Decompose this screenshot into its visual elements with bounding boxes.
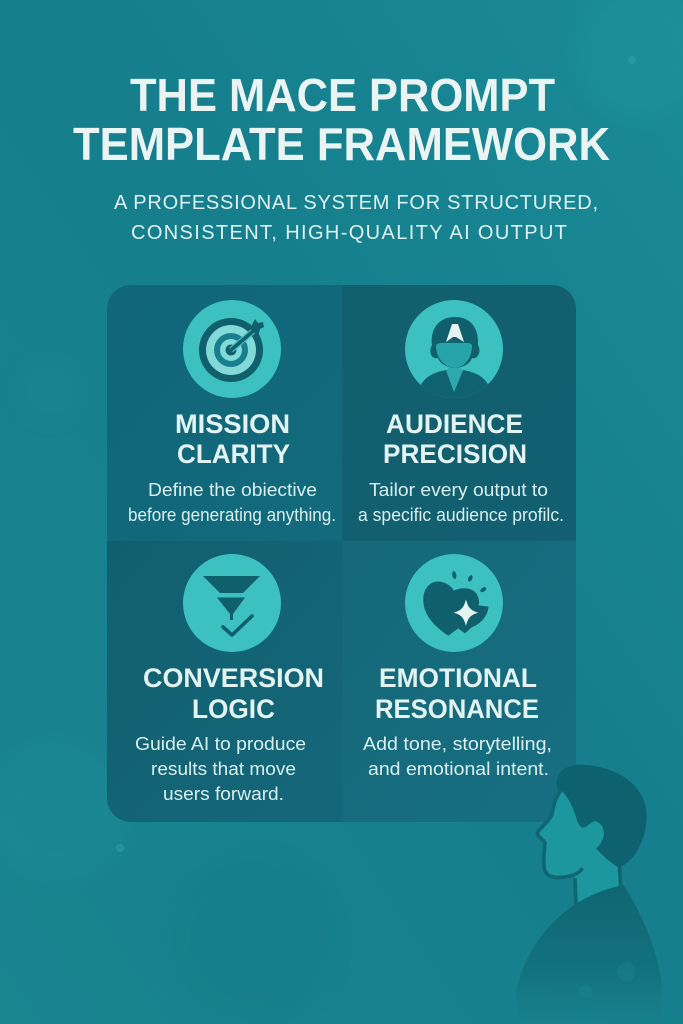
panel: mission clarity — [128, 300, 336, 525]
text: audience precision description: Tailor every output to — [369, 479, 548, 500]
title — [73, 69, 610, 170]
subtitle: A PROFESSIONAL SYSTEM FOR STRUCTURED, — [114, 192, 598, 214]
text: emotional resonance description: and emotional intent. — [368, 758, 549, 779]
text: conversion logic description — [135, 733, 306, 804]
heading: audience precision — [383, 409, 527, 469]
heading: mission clarity — [175, 409, 290, 469]
heading: emotional resonance: RESONANCE — [375, 694, 539, 724]
icon: funnel with check — [183, 554, 281, 652]
heading: audience precision: AUDIENCE — [386, 409, 523, 439]
illustration: person silhouette — [517, 765, 662, 1024]
text: audience precision description — [358, 479, 564, 525]
text: conversion logic description: users forward. — [163, 783, 284, 804]
heading: mission clarity: MISSION — [175, 409, 290, 439]
panel: emotional resonance — [363, 554, 552, 779]
text: audience precision description: a specific audience profilc. — [358, 504, 564, 525]
subtitle — [114, 192, 598, 244]
heading: conversion logic: CONVERSION — [143, 663, 324, 693]
panel: audience precision — [358, 300, 564, 525]
title: TEMPLATE FRAMEWORK — [73, 118, 610, 170]
heading: audience precision: PRECISION — [383, 439, 527, 469]
icon: heart with sparkle — [405, 554, 503, 652]
text: conversion logic description: Guide AI to produce — [135, 733, 306, 754]
heading: conversion logic — [143, 663, 324, 724]
icon: audience person — [405, 300, 503, 400]
heading: mission clarity: CLARITY — [177, 439, 290, 469]
panel: conversion logic — [135, 554, 324, 804]
heading: emotional resonance: EMOTIONAL — [379, 663, 537, 693]
text: emotional resonance description: Add tone, storytelling, — [363, 733, 552, 754]
heading: conversion logic: LOGIC — [192, 694, 275, 724]
text: mission clarity description — [128, 479, 336, 525]
subtitle: CONSISTENT, HIGH-QUALITY AI OUTPUT — [131, 222, 567, 244]
text: mission clarity description: before generating anything. — [128, 504, 336, 525]
text: emotional resonance description — [363, 733, 552, 779]
icon: target with arrow — [183, 300, 281, 398]
title: THE MACE PROMPT — [130, 69, 555, 121]
panel: framework grid — [107, 285, 576, 822]
heading: emotional resonance — [375, 663, 539, 724]
text: mission clarity description: Define the obiective — [148, 479, 317, 500]
text: conversion logic description: results that move — [151, 758, 296, 779]
